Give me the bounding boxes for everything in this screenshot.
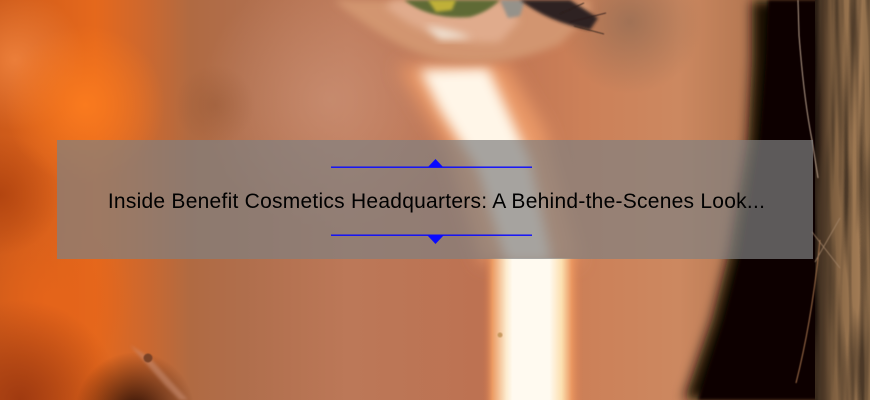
grey title band	[57, 140, 813, 259]
title: Inside Benefit Cosmetics Headquarters: A Behind-the-Scenes Look...	[108, 190, 765, 213]
dark hair shadow at right	[684, 0, 870, 400]
cheek mole and highlight	[130, 345, 188, 400]
eye: lid, iris and lashes	[336, 0, 606, 63]
thin stray hair strands	[796, 0, 840, 383]
light streak across cheek	[398, 62, 584, 400]
